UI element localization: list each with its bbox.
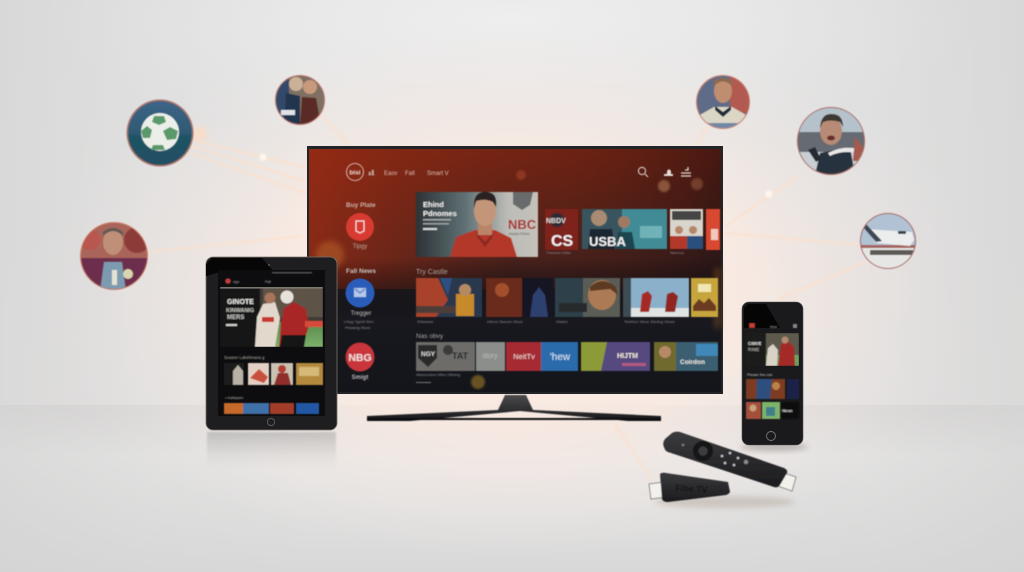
TV row 1 thumbnails: USBA <box>589 234 626 249</box>
TV row 3 thumbnails: NGY <box>421 351 436 358</box>
phone thumbnails <box>746 373 799 419</box>
circle: football <box>126 100 194 166</box>
phone body <box>742 302 803 445</box>
phone <box>742 302 803 445</box>
TV row 1 thumbnails: Nanonzo <box>670 251 684 255</box>
phone shadow <box>740 443 808 451</box>
TV navigation bar <box>346 164 449 180</box>
TV sidebar: NBG: Smigt <box>352 375 368 381</box>
TV hero card: Pdnomes <box>423 209 457 218</box>
tablet thumbnail rows <box>224 355 323 414</box>
TV hero card <box>416 192 538 257</box>
TV bezel <box>307 146 723 394</box>
tablet hero: football players: GINOTE <box>227 299 254 306</box>
HDMI dongle <box>649 473 730 502</box>
TV row 3 thumbnails: Coirdon <box>680 359 705 366</box>
tablet <box>206 257 337 430</box>
TV row 1 thumbnails <box>545 209 720 255</box>
TV row 2 thumbnails: Telethon Steve Sterling Ginws <box>624 320 675 324</box>
TV row 3 thumbnails: HIJTM <box>617 353 638 360</box>
TV navigation bar: Easv <box>384 171 397 177</box>
TV sidebar: Fall News: Tregger <box>351 311 371 317</box>
TV hero card: Ehind <box>423 200 444 209</box>
circle: man in maroon jacket <box>80 222 150 292</box>
TV row 3 thumbnails <box>416 342 718 383</box>
TV sidebar: Fall News: Fall News <box>346 268 376 275</box>
TV row 3 heading: Nas obvy <box>416 333 444 340</box>
TV sidebar: Buy Plate <box>346 202 376 250</box>
TV interface content <box>344 164 720 383</box>
tablet body <box>206 257 337 430</box>
phone home button <box>766 432 776 440</box>
TV sidebar: Fall News: Pleasing Stuvs <box>345 326 370 330</box>
tablet hero: football players <box>220 287 323 347</box>
TV row 1 thumbnails: NBDV <box>546 218 566 225</box>
TV hero card: NBC <box>508 217 537 232</box>
tablet thumbnail rows: Season Lakshmana g <box>224 355 265 360</box>
TV row 3 thumbnails: NeitTv <box>513 352 535 361</box>
circle: man with aircraft <box>797 107 865 176</box>
phone hero: CIMVE <box>748 341 761 346</box>
TV navigation bar: Smart V <box>427 171 449 177</box>
phone hero <box>746 333 799 366</box>
TV navigation bar: bisi <box>349 170 361 176</box>
TV navigation bar: Fall <box>405 171 415 177</box>
TV sidebar: NBG: NBG <box>348 352 372 364</box>
TV row 2 thumbnails: Initcon Swoom Stoos <box>487 320 523 324</box>
tablet top bar: Pall <box>265 280 271 284</box>
tablet reflection <box>207 432 336 470</box>
TV screen background <box>309 149 721 392</box>
phone top bar: Now <box>770 325 777 329</box>
circle: man in white shirt <box>696 75 750 130</box>
streaming stick dongle and remote <box>649 432 796 502</box>
TV row 2 thumbnails: Shlweaze <box>417 320 433 324</box>
TV sidebar: Fall News <box>344 268 376 330</box>
TV sidebar: Buy Plate: Buy Plate <box>346 202 376 209</box>
TV sidebar: NBG <box>346 342 374 381</box>
tablet thumbnail rows: • Kattayam <box>225 396 243 400</box>
tablet home button <box>267 418 275 426</box>
tablet top bar <box>225 272 312 284</box>
TV icons: search, profile, settings <box>638 167 691 177</box>
TV stand <box>367 395 661 421</box>
TV row 1 thumbnails: CS <box>551 233 574 250</box>
TV row 3 thumbnails: Missouriane Miles Hibsing <box>416 373 460 377</box>
circle: airliner <box>860 213 916 270</box>
phone hero: RINIE <box>748 347 759 352</box>
HDMI dongle: Fibe TV <box>675 483 708 495</box>
TV row 3 thumbnails: 'hew <box>550 352 571 363</box>
phone top bar <box>749 323 797 329</box>
phone thumbnails: Ninan <box>782 409 793 413</box>
remote body <box>663 432 796 491</box>
TV row 2 heading: Try Castle <box>416 269 448 276</box>
tablet top bar: sign <box>233 280 239 284</box>
TV: large screen with streaming interface <box>307 146 723 421</box>
TV sidebar: Buy Plate: Tipgy <box>353 244 367 250</box>
TV row 1 thumbnails: Tmnesse Indian <box>546 251 571 255</box>
TV row 3 thumbnails: TAT <box>452 351 469 361</box>
circle: two people <box>275 75 325 125</box>
light rays connecting circles to the TV <box>150 116 866 480</box>
TV row 3 thumbnails: story <box>482 353 498 360</box>
TV hero card: Indian Picks <box>509 232 530 236</box>
tablet hero: football players: MERS <box>227 315 244 321</box>
streaming stick shadow <box>655 496 795 508</box>
tablet hero: football players: KINWANIG <box>226 308 254 314</box>
TV row 2 thumbnails: Hiases <box>556 320 568 324</box>
phone thumbnails: Please fivs can <box>747 373 773 377</box>
TV row 2 thumbnails <box>416 278 718 324</box>
TV sidebar: Fall News: Lrbyg Tgenil Slnn <box>344 320 373 324</box>
